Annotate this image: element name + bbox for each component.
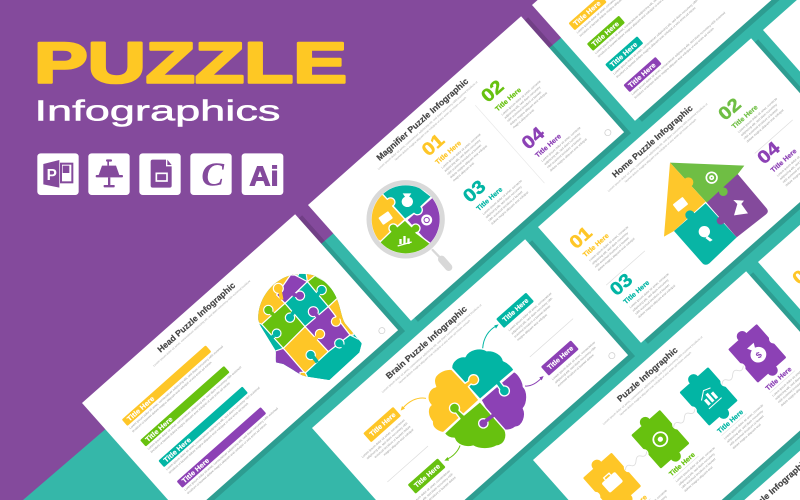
- arrow: teal: [483, 324, 499, 348]
- item 01: [417, 108, 493, 184]
- panel: magnifier puzzle slide: [308, 16, 624, 321]
- item 01: magna aliquam erat: [452, 161, 475, 182]
- icon: Canva: C: [201, 157, 224, 194]
- graphic: puzzle brain: [428, 349, 527, 449]
- tag: teal: tincidunt ut laoreet dolore magna aliquam erat volutpat ut wisi enim ad minim: [615, 6, 697, 79]
- step 2 label: dolore magna aliquam erat: [683, 465, 714, 493]
- bar: purple: tincidunt ut laoreet dolore magna aliquam erat volutpat ut wisi enim ad minim: [186, 422, 268, 495]
- item 01: dolore magna aliquam erat volutpat: [597, 237, 636, 272]
- arrow: purple: [525, 376, 544, 386]
- step 3: teal piece: [678, 365, 740, 428]
- tag: teal: [496, 280, 561, 343]
- arrow: yellow: [401, 398, 426, 411]
- title: head: Head Puzzle Infographic: [155, 280, 237, 354]
- dividers: [387, 318, 573, 483]
- title: brain: Brain Puzzle Infographic: [384, 304, 469, 381]
- item 01: Title Here: [434, 140, 463, 166]
- tag: green: Title Here: [591, 21, 621, 48]
- step 3 label: Title Here: [716, 409, 745, 435]
- item 03: 03: [458, 176, 490, 206]
- step 2 label: nibh euismod tincidunt ut laoreet: [680, 457, 716, 490]
- step 1: yellow piece: [581, 450, 643, 500]
- item 02: 02: [714, 93, 745, 124]
- step 2 label: [668, 439, 725, 493]
- piece: teal: [452, 349, 514, 399]
- icon: slide logo: [608, 351, 616, 360]
- item 01: 01: [417, 129, 448, 160]
- icon: badge: [422, 216, 431, 224]
- step 3 label: [716, 396, 773, 450]
- item 01: Title Here: [582, 233, 611, 259]
- item 02: [714, 73, 787, 145]
- icon: Keynote: [88, 153, 130, 195]
- item 02: adipiscing elit, sed diam nonummy: [503, 85, 542, 120]
- tag: purple: euismod tincidunt ut laoreet dolore: [557, 353, 595, 387]
- item 02: dolore magna aliquam erat volutpat: [746, 108, 785, 143]
- tag: purple: [541, 329, 602, 387]
- bar: green: Title Here: [145, 416, 175, 444]
- item 01: adipiscing elit, sed diam nonummy: [591, 231, 629, 265]
- item 01: [565, 201, 638, 274]
- item 04: 04: [517, 122, 549, 153]
- step 3 label: adipiscing elit, sed diam nonummy: [726, 409, 764, 444]
- title: puzzle: Puzzle Infographic: [615, 345, 680, 404]
- item 02: magna aliquam erat: [512, 108, 535, 129]
- item 02: dolore magna aliquam erat volutpat: [509, 91, 548, 126]
- subtitle: home: Lorem ipsum dolor sit amet, consectetuer adipiscing elit, sed diam nonummy nibh euismod tincidunt ut: [607, 102, 708, 193]
- tag: yellow: Lorem ipsum dolor sit amet, consectetuer: [361, 418, 406, 459]
- item 04: 04: [753, 137, 784, 168]
- piece: yellow: [428, 369, 479, 433]
- heading: PUZZLE: PUZZLE: [34, 31, 347, 95]
- panel: home puzzle slide: [538, 38, 800, 343]
- tag: green: [396, 457, 457, 500]
- item 04: Title Here: [770, 148, 799, 174]
- app icons row: [37, 153, 283, 195]
- panel: brain puzzle slide: [312, 239, 628, 500]
- piece: yellow roof: [664, 163, 706, 237]
- title: home: Home Puzzle Infographic: [610, 103, 695, 180]
- item 03: Title Here: [476, 186, 504, 213]
- piece: teal wall: [674, 203, 737, 265]
- tag: yellow: magna aliquam erat volutpat: [382, 428, 414, 457]
- divider: [475, 105, 544, 183]
- icon: Illustrator: [242, 153, 283, 195]
- piece: green roof: [670, 163, 744, 203]
- icon: chart: [398, 236, 412, 246]
- step 2: green piece: [629, 407, 691, 471]
- icon: PowerPoint: [37, 153, 79, 195]
- item 01: nibh euismod tincidunt ut laoreet: [594, 236, 630, 269]
- item 01: 01: [565, 222, 596, 253]
- subtitle: brain: laoreet dolore magna aliquam erat volutpat ut wisi enim ad minim veniam: [398, 318, 472, 384]
- tag: purple: adipiscing elit, sed diam nonummy nibh: [554, 345, 597, 384]
- item 03: Lorem ipsum dolor sit amet, consecte: [629, 272, 670, 309]
- tag: purple: Lorem ipsum dolor sit amet, consectetuer: [551, 340, 596, 381]
- graphic: magnifier puzzle: [363, 177, 453, 267]
- icon: Canva: [190, 153, 232, 195]
- item 01: Lorem ipsum dolor sit amet, consecte: [588, 225, 629, 262]
- bar: teal: Lorem ipsum dolor sit amet, consectetuer adipiscing elit, sed diam nonummy nibh euismod: [165, 386, 261, 471]
- panel: bottom right slide: [654, 391, 800, 500]
- panel: top list slide: [532, 0, 800, 121]
- piece: green: [444, 402, 506, 449]
- item 02: Title Here: [494, 87, 523, 113]
- icon: flask: [733, 200, 748, 215]
- tag: teal: Lorem ipsum dolor sit amet, consectetuer: [507, 292, 553, 332]
- tag: yellow: Title Here: [573, 0, 603, 28]
- item 03: nibh euismod tincidunt ut laoreet: [487, 190, 523, 222]
- puzzle knobs: [683, 177, 728, 225]
- dividers: [606, 120, 793, 285]
- item 01: adipiscing elit, sed diam nonummy: [443, 138, 482, 173]
- item 03: adipiscing elit, sed diam nonummy: [485, 184, 523, 219]
- tag: yellow: adipiscing elit, sed diam nonummy nibh: [366, 421, 409, 460]
- item 03: [605, 248, 679, 321]
- tag: yellow: [351, 407, 415, 468]
- icon: slide logo: [604, 128, 612, 137]
- piece: purple wall: [707, 174, 768, 237]
- bar: teal: Title Here: [163, 437, 193, 464]
- item 03: dolore magna aliquam erat volutpat: [637, 284, 676, 319]
- item 01: dolore magna aliquam erat volutpat: [449, 144, 488, 179]
- icon: briefcase: [378, 211, 393, 225]
- item 01: nibh euismod tincidunt ut laoreet: [446, 143, 482, 176]
- step 4 label: Title Here: [765, 366, 793, 392]
- item 03: dolore magna aliquam erat volutpat: [490, 190, 529, 226]
- step 4: purple piece: $: [754, 350, 764, 360]
- tag: purple: tincidunt ut laoreet dolore magna aliquam erat volutpat ut wisi enim ad minim: [633, 26, 715, 99]
- step 4 label: [765, 353, 800, 407]
- bar: yellow: tincidunt ut laoreet dolore magna aliquam erat volutpat ut wisi enim ad minim: [131, 360, 213, 433]
- item 04: dolore magna aliquam erat volutpat: [549, 137, 588, 172]
- item 02: adipiscing elit, sed diam nonummy: [740, 102, 778, 137]
- bar: green: tincidunt ut laoreet dolore magna aliquam erat volutpat ut wisi enim ad minim: [150, 381, 231, 454]
- wavy connectors: [624, 364, 745, 472]
- item 04: [753, 116, 800, 189]
- item 01: Lorem ipsum dolor sit amet, consecte: [440, 132, 482, 170]
- item 02: 02: [477, 75, 508, 106]
- panel: top right slide: [763, 0, 800, 146]
- subtitle: brain: Lorem ipsum dolor sit amet, consectetuer adipiscing elit, sed diam nonummy nibh euismod tincidunt ut: [381, 303, 482, 394]
- panel: right middle slide: [758, 73, 800, 378]
- puzzle pieces: [372, 185, 440, 254]
- tag: yellow: euismod tincidunt ut laoreet dolore: [373, 424, 412, 459]
- item 03: Title Here: [623, 280, 651, 306]
- bar: green: Lorem ipsum dolor sit amet, consectetuer adipiscing elit, sed diam nonummy nibh euismod: [147, 365, 242, 451]
- item 02: Lorem ipsum dolor sit amet, consecte: [737, 97, 778, 134]
- step 3 label: dolore magna aliquam erat: [732, 423, 762, 450]
- subtitle: magnifier: Lorem ipsum dolor sit amet, consectetuer adipiscing elit, sed diam nonummy nibh euismod tincidunt ut: [377, 80, 478, 171]
- bar: yellow: Lorem ipsum dolor sit amet, consectetuer adipiscing elit, sed diam nonummy nibh euismod: [128, 345, 224, 430]
- subtitle: home: laoreet dolore magna aliquam erat volutpat ut wisi enim ad minim veniam: [624, 117, 698, 183]
- graphic: puzzle head: [258, 274, 362, 380]
- tag: purple: Lorem ipsum dolor sit amet, consectetuer adipiscing elit, sed diam nonummy nibh euismod: [631, 11, 726, 96]
- icon: bulb: [699, 226, 713, 242]
- step 2 label: Title Here: [668, 452, 697, 478]
- magnifier ring: [369, 183, 442, 256]
- panel: puzzle steps slide: [533, 271, 800, 500]
- icon: Illustrator: Ai: [249, 161, 279, 192]
- magnifier handle: [433, 250, 449, 267]
- tag: teal: Title Here: [609, 41, 639, 69]
- item 02: nibh euismod tincidunt ut laoreet: [506, 90, 542, 123]
- icon: briefcase: [673, 197, 688, 212]
- item 03: Lorem ipsum dolor sit amet, consecte: [482, 179, 523, 216]
- item 03: adipiscing elit, sed diam nonummy: [631, 278, 670, 312]
- bar: purple: Title Here: [181, 457, 211, 485]
- bar: teal: tincidunt ut laoreet dolore magna aliquam erat volutpat ut wisi enim ad minim: [168, 401, 249, 474]
- tag: teal: Title Here: [502, 297, 530, 324]
- panel: head puzzle slide: [82, 214, 398, 500]
- step 3 label: Lorem ipsum dolor sit amet, consecte: [723, 403, 764, 440]
- subtitle: magnifier: laoreet dolore magna aliquam erat volutpat ut wisi enim ad minim veniam: [394, 95, 468, 161]
- item 02: Lorem ipsum dolor sit amet, consecte: [500, 79, 542, 116]
- item 04: [517, 102, 590, 174]
- tag: purple: Title Here: [628, 62, 658, 90]
- tag: teal: adipiscing elit, sed diam nonummy nibh: [510, 296, 554, 335]
- item 02: [477, 55, 553, 131]
- icon: target: [706, 172, 717, 183]
- icon: slide logo: [378, 326, 386, 335]
- step 2 label: adipiscing elit, sed diam nonummy: [678, 452, 716, 486]
- arrow: green: [444, 443, 461, 461]
- subtitle: puzzle: laoreet dolore magna aliquam erat volutpat ut wisi enim ad minim veniam: [619, 350, 693, 416]
- item 03: nibh euismod tincidunt ut laoreet: [634, 283, 670, 316]
- tag: teal: magna aliquam erat volutpat: [516, 313, 548, 342]
- title: magnifier: Magnifier Puzzle Infographic: [374, 76, 470, 163]
- tag: yellow: Title Here: [369, 412, 397, 438]
- item 03: 03: [605, 269, 636, 300]
- subtitle: puzzle: Lorem ipsum dolor sit amet, consectetuer adipiscing elit, sed diam nonummy nibh euismod tincidunt ut: [602, 335, 703, 426]
- heading: Infographics: Infographics: [34, 96, 280, 128]
- item 04: nibh euismod tincidunt ut laoreet: [546, 137, 582, 169]
- arrows: brain connectors: [401, 324, 544, 461]
- bar: yellow: Title Here: [126, 395, 156, 423]
- tag: purple: Title Here: [547, 345, 575, 372]
- icon: Google Slides: [139, 153, 181, 195]
- step 2 label: Lorem ipsum dolor sit amet, consecte: [675, 446, 716, 483]
- tag: teal: euismod tincidunt ut laoreet dolore: [513, 304, 551, 339]
- graphic: home puzzle: [664, 163, 768, 265]
- item 02: nibh euismod tincidunt ut laoreet: [743, 108, 779, 140]
- step 4: purple piece: [726, 322, 788, 385]
- subtitle: head: Lorem ipsum dolor sit amet, consectetuer adipiscing elit, sed diam nonummy nibh euismod tincidunt: [152, 279, 251, 368]
- piece: purple: [481, 372, 527, 430]
- item 02: Title Here: [731, 104, 760, 131]
- item 04: Lorem ipsum dolor sit amet, consecte: [540, 126, 581, 163]
- knob: purple: [479, 415, 494, 428]
- tag: green: Title Here: [413, 463, 442, 490]
- step 1 label: [620, 481, 674, 500]
- icon: PowerPoint: P: [47, 167, 57, 184]
- bar: purple: Lorem ipsum dolor sit amet, consectetuer adipiscing elit, sed diam nonummy nibh euismod: [183, 406, 279, 492]
- item 04: Title Here: [534, 133, 563, 160]
- step 3 label: nibh euismod tincidunt ut laoreet: [729, 414, 765, 447]
- item 04: adipiscing elit, sed diam nonummy: [543, 131, 582, 166]
- icon: money bag: [402, 193, 413, 207]
- item 03: [458, 155, 532, 227]
